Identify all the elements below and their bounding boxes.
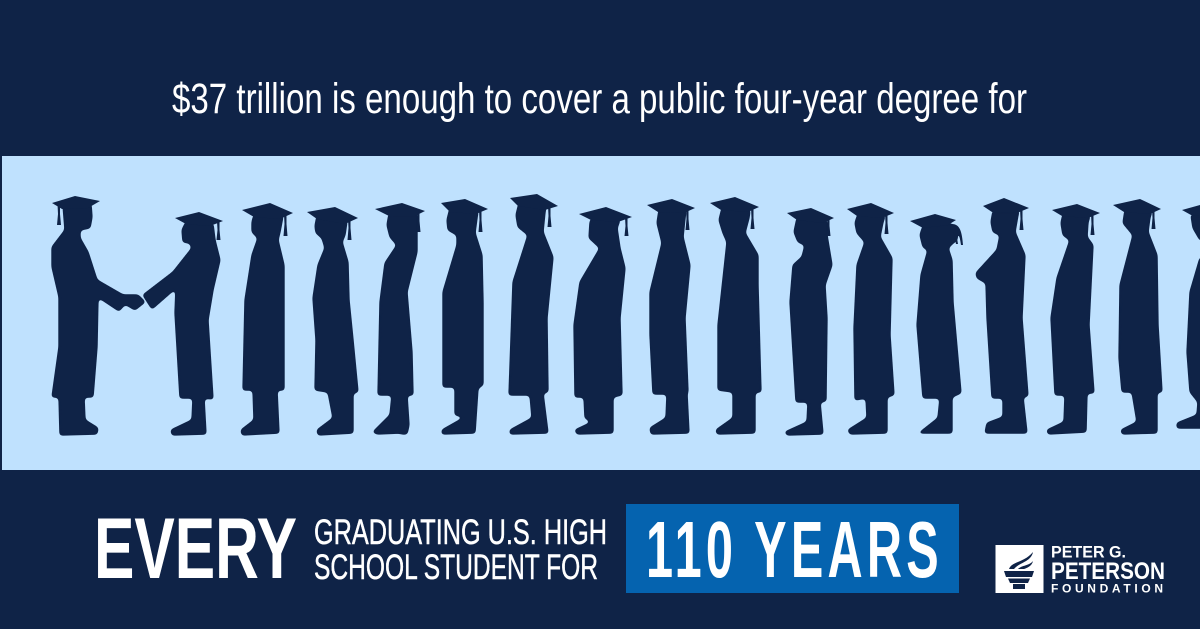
figure: graduate 5 woman: [373, 203, 425, 434]
panel: graduates line: [2, 156, 1200, 470]
figure: graduate 9: [647, 199, 695, 434]
callout: 110 years: 110 YEARS: [646, 505, 943, 594]
figure: graduate 17 cut off at edge: [1177, 205, 1200, 428]
icon: torch: [996, 545, 1044, 593]
figure: graduate 10: [710, 197, 761, 434]
logo: Peter G. Peterson Foundation: PETERSON: [1051, 558, 1165, 585]
logo: Peter G. Peterson Foundation: PETER G.: [1051, 544, 1126, 562]
figure: graduate woman shaking hands: [143, 212, 223, 435]
figure: graduate 15: [1047, 204, 1100, 434]
figure: graduate 13 woman with loose hair: [910, 214, 963, 433]
figure: graduate 7: [509, 194, 558, 434]
figure: graduate 11 woman: [785, 208, 834, 435]
figure: graduate 4: [307, 207, 358, 435]
figure: graduate 16: [1113, 199, 1162, 434]
text block: graduating students: GRADUATING U.S. HIGH: [314, 513, 607, 552]
callout: 110 years: [626, 504, 959, 594]
figure: graduate 8: [574, 207, 632, 434]
text block: graduating students: SCHOOL STUDENT FOR: [314, 548, 598, 587]
figure: graduate 14 arms folded: [976, 198, 1029, 433]
heading: EVERY: EVERY: [94, 501, 297, 597]
figure: graduate 12: [847, 203, 894, 434]
figure: graduate man shaking hands: [52, 196, 145, 435]
figure: graduate 6: [441, 199, 488, 434]
text block: graduating students: [314, 513, 607, 587]
figure: graduate 3: [241, 203, 293, 435]
logo: Peter G. Peterson Foundation: [996, 544, 1165, 596]
logo: Peter G. Peterson Foundation: FOUNDATION: [1051, 582, 1163, 596]
